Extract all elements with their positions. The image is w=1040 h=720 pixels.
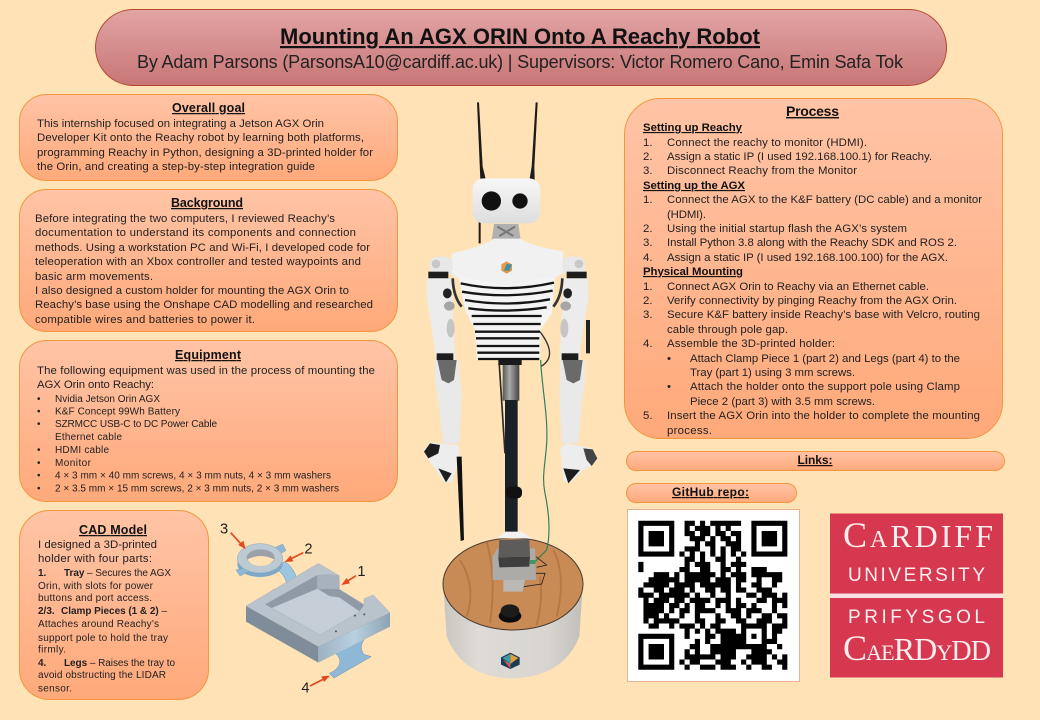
heading: process: Process <box>786 103 839 119</box>
equipment list: K&F Concept 99Wh Battery <box>55 406 180 418</box>
round black button <box>499 604 521 623</box>
hanging cable <box>540 332 550 367</box>
number labels: 2 <box>304 542 312 558</box>
robot upper body <box>427 102 590 370</box>
mounted tray with AGX Orin <box>493 539 536 592</box>
background text: documentation to understand its components and connection <box>35 227 356 239</box>
holder: clamp stalk and foot <box>273 562 307 595</box>
heading: equipment: Equipment <box>175 348 242 362</box>
equipment intro <box>37 365 375 391</box>
equipment list: • <box>37 406 41 418</box>
CAD model text: firmly. <box>38 644 66 656</box>
section: setting up the AGX: 1. <box>643 194 652 206</box>
section: physical mounting: process. <box>667 425 712 437</box>
background text: basic arm movements. <box>35 271 153 283</box>
pole flange <box>497 532 532 538</box>
section: setting up the AGX: (HDMI). <box>667 209 706 221</box>
wooden top <box>443 538 583 630</box>
section: physical mounting <box>643 266 980 437</box>
CAD model text: buttons and port access. <box>38 593 152 604</box>
section: physical mounting: 4. <box>643 338 652 350</box>
CAD model text: sensor. <box>38 684 72 694</box>
antennas <box>477 102 538 243</box>
holder: tray <box>246 563 390 663</box>
section: physical mounting: cable through pole gap. <box>667 324 788 336</box>
section: physical mounting: 1. <box>643 281 652 293</box>
panel: background <box>20 190 398 332</box>
heading: overall goal: Overall goal <box>172 101 245 115</box>
section: physical mounting: Assemble the 3D-printed holder: <box>667 338 835 350</box>
section: setting up Reachy: 1. <box>643 137 652 149</box>
section: physical mounting: 2. <box>643 295 652 307</box>
section: physical mounting: Tray (part 1) using 3 mm screws. <box>690 367 855 379</box>
pole <box>498 360 522 533</box>
CAD diagram: holder with numbered arrows <box>220 522 390 696</box>
section: setting up the AGX <box>643 180 982 264</box>
GitHub repo label: GitHub repo: <box>672 485 749 499</box>
section: setting up the AGX: Using the initial startup flash the AGX’s system <box>667 223 907 235</box>
CAD model text: I designed a 3D-printed <box>38 539 157 551</box>
section: physical mounting: • <box>667 353 671 365</box>
overall goal text: the Orin, and creating a step-by-step integration guide <box>37 161 315 173</box>
background text: Before integrating the two computers, I reviewed Reachy’s <box>35 213 335 225</box>
overall goal text: Developer Kit onto the Reachy robot by learning both platforms, <box>37 132 364 144</box>
section: physical mounting: Piece 2 (part 3) with 3.5 mm screws. <box>690 396 875 408</box>
arrow: part 3 <box>231 533 246 549</box>
CAD model text: Legs – Raises the tray to <box>64 658 175 669</box>
robot photo illustration: Reachy with mounted holder <box>423 102 597 678</box>
CAD model text: Orin, with slots for power <box>38 581 154 592</box>
neck <box>492 224 521 240</box>
number labels: 3 <box>220 522 228 538</box>
links bar <box>626 452 1004 470</box>
overall goal text: programming Reachy in Python, designing a 3D-printed holder for <box>37 147 373 159</box>
background text: teleoperation with an Xbox controller and tested waypoints and <box>35 256 361 268</box>
section: physical mounting: Attach Clamp Piece 1 (part 2) and Legs (part 4) to the <box>690 353 960 365</box>
equipment list: • <box>37 458 41 469</box>
equipment list: • <box>37 419 41 430</box>
QR code <box>628 510 800 682</box>
section: setting up Reachy: Disconnect Reachy from the Monitor <box>667 165 857 177</box>
CAD model text <box>38 539 175 694</box>
background text: methods. Using a workstation PC and Wi-Fi, I developed code for <box>35 242 370 254</box>
equipment list: HDMI cable <box>55 445 109 456</box>
left arm <box>427 257 462 370</box>
shoulders and chest <box>452 239 563 286</box>
equipment list: • <box>37 484 41 494</box>
equipment list: Nvidia Jetson Orin AGX <box>55 394 160 405</box>
section: physical mounting: Insert the AGX Orin into the holder to complete the mounting <box>667 410 980 422</box>
title: Mounting An AGX ORIN Onto A Reachy Robot <box>280 24 761 49</box>
section: setting up Reachy: Assign a static IP (I used 192.168.100.1) for Reachy. <box>667 151 932 163</box>
CAD model text: Tray – Secures the AGX <box>64 568 171 579</box>
section: setting up the AGX: 2. <box>643 223 652 235</box>
base logo <box>501 653 520 669</box>
section: setting up the AGX: Setting up the AGX <box>643 180 745 192</box>
right forearm and gripper <box>559 360 597 483</box>
section: setting up Reachy <box>643 122 932 177</box>
holder: legs <box>329 634 371 678</box>
section: setting up the AGX: Install Python 3.8 along with the Reachy SDK and ROS 2. <box>667 237 957 249</box>
section: physical mounting: Verify connectivity by pinging Reachy from the AGX Orin. <box>667 295 957 307</box>
section: setting up Reachy: 3. <box>643 165 652 177</box>
equipment list: • <box>37 470 41 482</box>
section: setting up the AGX: 4. <box>643 252 652 264</box>
links bar: Links: <box>798 453 832 467</box>
background text <box>35 213 373 326</box>
GitHub repo label <box>626 484 796 502</box>
arrow: part 2 <box>285 553 303 562</box>
head with eyes <box>473 178 540 223</box>
CAD model text: 1. <box>38 568 47 579</box>
CAD model text: Attaches around Reachy’s <box>38 619 159 630</box>
section: physical mounting: Physical Mounting <box>643 266 743 278</box>
overall goal text <box>37 118 373 173</box>
Cardiff University logo <box>830 514 1003 678</box>
section: physical mounting: 5. <box>643 410 652 422</box>
right arm <box>553 257 590 370</box>
title banner <box>96 10 946 86</box>
equipment list: • <box>37 394 41 405</box>
background text: I also designed a custom holder for mounting the AGX Orin to <box>35 285 349 297</box>
section: setting up Reachy: Setting up Reachy <box>643 122 743 134</box>
section: setting up Reachy: 2. <box>643 151 652 163</box>
CAD model text: support pole to hold the tray <box>38 633 168 644</box>
authors and supervisors: By Adam Parsons (ParsonsA10@cardiff.ac.uk) | Supervisors: Victor Romero Cano, Emin Safa Tok <box>137 52 904 72</box>
CAD model text: 4. <box>38 658 47 669</box>
holder: clamp ring <box>236 544 286 577</box>
panel: overall goal <box>20 94 398 180</box>
panel: CAD model <box>20 510 208 700</box>
Prifysgol: PRIFYSGOL <box>848 607 985 628</box>
equipment list: SZRMCC USB-C to DC Power Cable <box>55 419 217 430</box>
section: physical mounting: Attach the holder onto the support pole using Clamp <box>690 381 960 393</box>
left forearm and gripper <box>423 360 464 541</box>
CAD model text: avoid obstructing the LIDAR <box>38 670 166 681</box>
black wires <box>523 557 547 587</box>
number labels: 1 <box>357 564 365 580</box>
section: setting up the AGX: 3. <box>643 237 652 249</box>
CAD model text: holder with four parts: <box>38 553 152 565</box>
equipment list <box>37 394 339 494</box>
chest logo <box>501 261 512 274</box>
panel: process <box>624 98 1002 438</box>
section: setting up the AGX: Connect the AGX to the K&F battery (DC cable) and a monitor <box>667 194 982 206</box>
heading: CAD model: CAD Model <box>79 523 147 537</box>
section: physical mounting: • <box>667 381 671 393</box>
background text: compatible wires and batteries to power it. <box>35 314 255 326</box>
panel: equipment <box>20 340 398 502</box>
base cylinder <box>443 587 583 678</box>
equipment list: Ethernet cable <box>55 432 122 443</box>
robot lower body <box>423 360 597 678</box>
CAD model text: Clamp Pieces (1 & 2) – <box>61 606 167 617</box>
CAD model text: 2/3. <box>38 606 55 617</box>
section: setting up the AGX: Assign a static IP (I used 192.168.100.100) for the AGX. <box>667 252 948 264</box>
equipment list: 2 × 3.5 mm × 15 mm screws, 2 × 3 mm nuts, 2 × 3 mm washers <box>55 484 339 494</box>
number labels: 4 <box>301 680 309 696</box>
equipment list: 4 × 3 mm × 40 mm screws, 4 × 3 mm nuts, 4 × 3 mm washers <box>55 470 331 482</box>
equipment intro: The following equipment was used in the process of mounting the <box>37 365 375 377</box>
section: physical mounting: Secure K&F battery inside Reachy’s base with Velcro, routing <box>667 309 980 321</box>
Caerdydd: CAERDYDD <box>843 628 991 668</box>
equipment list: Monitor <box>55 458 92 469</box>
heading: background: Background <box>171 196 243 210</box>
section: physical mounting: Connect AGX Orin to Reachy via an Ethernet cable. <box>667 281 929 293</box>
number labels <box>220 522 365 696</box>
section: setting up Reachy: Connect the reachy to monitor (HDMI). <box>667 137 867 149</box>
Cardiff English wordmark: CARDIFF <box>843 515 993 555</box>
background text: Reachy’s base using the Onshape CAD modelling and researched <box>35 299 373 311</box>
arrow: part 1 <box>341 576 356 585</box>
overall goal text: This internship focused on integrating a Jetson AGX Orin <box>37 118 324 130</box>
equipment intro: AGX Orin onto Reachy: <box>37 379 154 391</box>
section: physical mounting: 3. <box>643 309 652 321</box>
striped shirt <box>458 276 555 360</box>
green wire <box>533 360 549 563</box>
University: UNIVERSITY <box>848 565 985 586</box>
arrow: part 4 <box>310 676 330 686</box>
equipment list: • <box>37 445 41 456</box>
